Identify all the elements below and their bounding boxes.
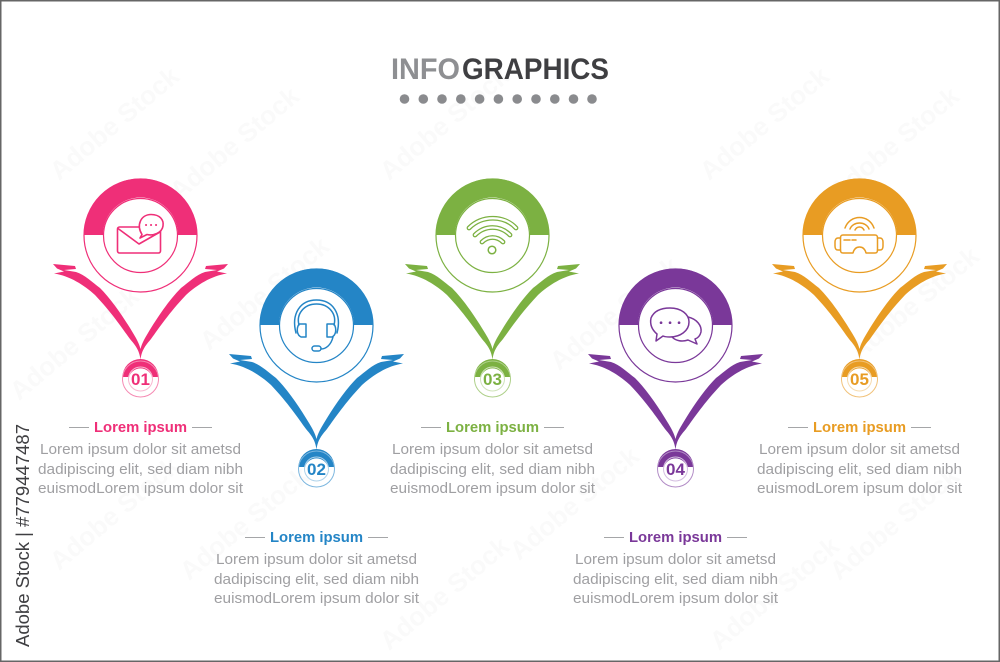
text block 03: dadipiscing elit, sed diam nibh xyxy=(390,461,595,478)
pin graphic 03 xyxy=(405,179,580,360)
text block 04: dadipiscing elit, sed diam nibh xyxy=(573,571,778,588)
text block 03 xyxy=(390,441,596,497)
text: Adobe Stock xyxy=(164,80,305,206)
stock id label: Adobe Stock | #779447487 xyxy=(13,424,33,647)
pin graphic 05 xyxy=(772,179,947,360)
icon: envelope with speech bubble xyxy=(118,214,163,253)
text: Adobe Stock xyxy=(174,460,315,586)
text block 01 xyxy=(38,441,244,497)
text block 02: Lorem ipsum dolor sit ametsd xyxy=(216,551,417,568)
text block 05 xyxy=(757,441,963,497)
icon: wifi xyxy=(469,218,516,254)
text block 02 xyxy=(214,551,420,607)
text: Adobe Stock xyxy=(504,440,645,566)
number badge 02: 02 xyxy=(307,460,326,479)
heading 05: Lorem ipsum xyxy=(813,420,906,436)
number badge 04 xyxy=(658,449,694,487)
text block 01: Lorem ipsum dolor sit ametsd xyxy=(40,441,241,458)
panel: step 04 xyxy=(573,269,779,607)
text block 01: dadipiscing elit, sed diam nibh xyxy=(38,461,243,478)
text block 02: euismodLorem ipsum dolor sit xyxy=(214,590,420,607)
text: Adobe Stock xyxy=(824,460,965,586)
panel: step 01 xyxy=(38,179,244,497)
heading 02: Lorem ipsum xyxy=(270,530,363,546)
text: Adobe Stock xyxy=(4,280,145,406)
number badge 01: 01 xyxy=(131,370,150,389)
text: Adobe Stock xyxy=(694,60,835,186)
heading 01: Lorem ipsum xyxy=(94,420,187,436)
text: Adobe Stock xyxy=(844,240,985,366)
text: Adobe Stock xyxy=(704,530,845,656)
title dots xyxy=(400,94,597,104)
text: Adobe Stock xyxy=(44,450,185,576)
number badge 03: 03 xyxy=(483,370,502,389)
text: Adobe Stock xyxy=(194,230,335,356)
text: Adobe Stock xyxy=(374,530,515,656)
text block 04 xyxy=(573,551,779,607)
title: GRAPHICS xyxy=(462,53,609,86)
text block 03: Lorem ipsum dolor sit ametsd xyxy=(392,441,593,458)
pin graphic 04 xyxy=(588,269,763,450)
icon: chat bubbles xyxy=(651,308,701,344)
panel: step 03 xyxy=(390,179,596,497)
number badge 05 xyxy=(842,359,878,397)
number badge 04: 04 xyxy=(666,460,685,479)
text block 04: Lorem ipsum dolor sit ametsd xyxy=(575,551,776,568)
text: Adobe Stock xyxy=(374,60,515,186)
icon: vr goggles xyxy=(835,218,883,253)
title: INFO xyxy=(391,53,460,86)
number badge 01 xyxy=(122,359,158,397)
text block 05: Lorem ipsum dolor sit ametsd xyxy=(759,441,960,458)
icon: headset xyxy=(295,300,338,351)
pin graphic 02 xyxy=(229,269,404,450)
text block 04: euismodLorem ipsum dolor sit xyxy=(573,590,779,607)
text block 03: euismodLorem ipsum dolor sit xyxy=(390,480,596,497)
number badge 05: 05 xyxy=(850,370,869,389)
text block 02: dadipiscing elit, sed diam nibh xyxy=(214,571,419,588)
number badge 02 xyxy=(298,449,334,487)
title xyxy=(391,53,609,86)
text block 05: dadipiscing elit, sed diam nibh xyxy=(757,461,962,478)
text block 01: euismodLorem ipsum dolor sit xyxy=(38,480,244,497)
heading 04: Lorem ipsum xyxy=(629,530,722,546)
pin graphic 01 xyxy=(53,179,228,360)
heading 03: Lorem ipsum xyxy=(446,420,539,436)
text: Adobe Stock xyxy=(544,250,685,376)
number badge 03 xyxy=(474,359,510,397)
text: Adobe Stock xyxy=(824,80,965,206)
panel: step 02 xyxy=(214,269,420,607)
text: Adobe Stock xyxy=(44,60,185,186)
text block 05: euismodLorem ipsum dolor sit xyxy=(757,480,963,497)
panel: step 05 xyxy=(757,179,963,497)
